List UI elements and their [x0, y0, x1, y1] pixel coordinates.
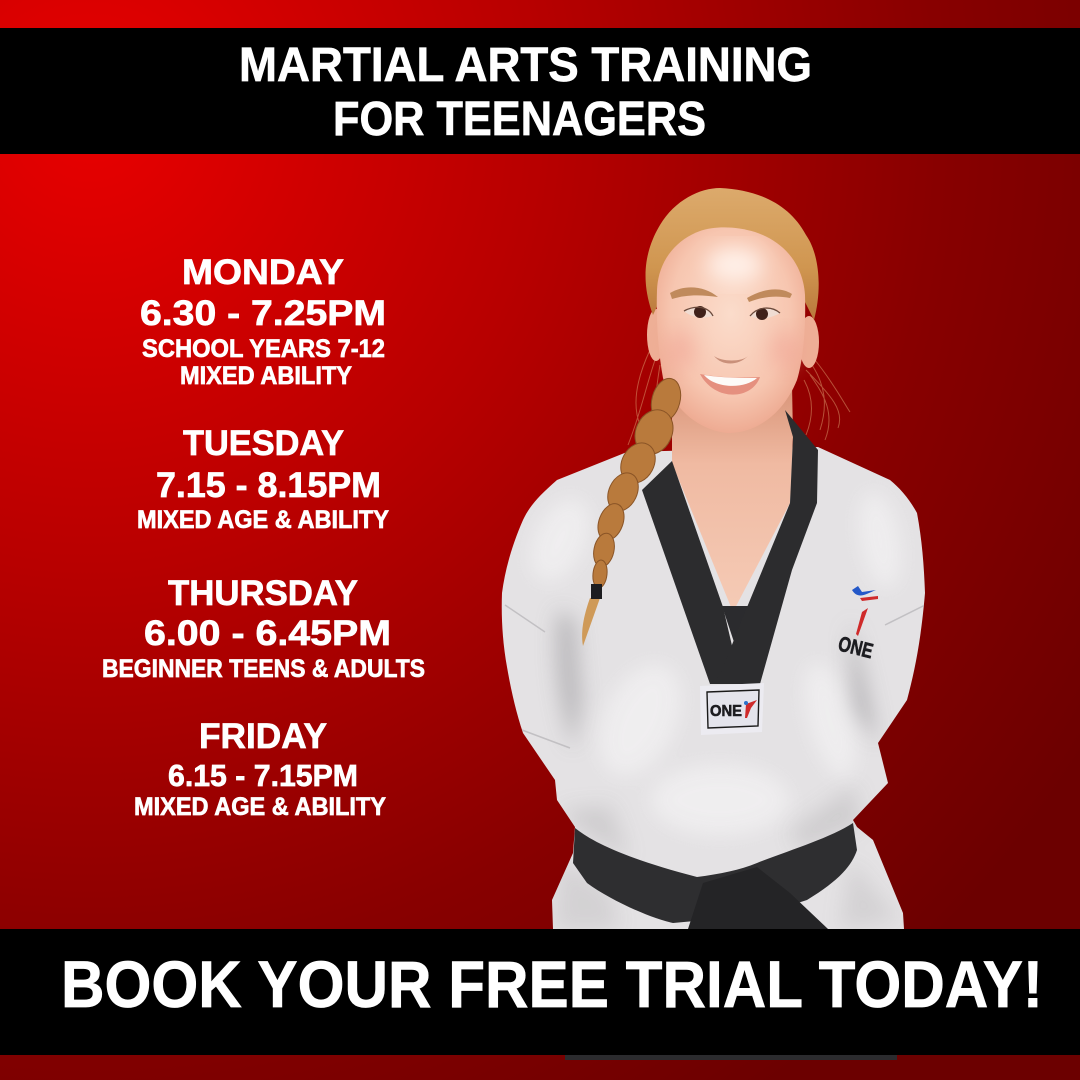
tuesday session: [137, 424, 389, 534]
friday session: MIXED AGE & ABILITY: [134, 793, 386, 821]
thursday session: BEGINNER TEENS & ADULTS: [102, 655, 425, 683]
eyebrows: [670, 287, 792, 302]
monday session: 6.30 - 7.25PM: [140, 294, 386, 333]
friday session: FRIDAY: [199, 717, 327, 756]
cheek blush: [665, 330, 800, 370]
flyaway hair: [628, 350, 850, 445]
gi shading: [555, 610, 900, 930]
sleeve logo: ONE: [836, 633, 875, 663]
thursday session: 6.00 - 6.45PM: [144, 614, 391, 653]
eyes: [684, 306, 780, 320]
belt knot: [688, 867, 828, 929]
thursday session: THURSDAY: [168, 574, 358, 613]
sleeve seams: [505, 605, 925, 748]
neck: [672, 385, 793, 612]
nose shadow: [714, 356, 748, 364]
schedule: [102, 253, 425, 821]
title: MARTIAL ARTS TRAINING: [239, 39, 812, 92]
gi badge: [700, 683, 764, 735]
tuesday session: TUESDAY: [183, 424, 344, 463]
forehead highlight: [707, 247, 763, 283]
black belt: [573, 823, 857, 923]
strip below banner: [565, 1055, 897, 1060]
black collar: [642, 410, 818, 684]
title: [239, 39, 812, 146]
left lapel: [642, 461, 733, 684]
tuesday session: 7.15 - 8.15PM: [156, 466, 381, 505]
left ear: [647, 309, 665, 361]
call to action banner: [0, 929, 1080, 1055]
monday session: MONDAY: [182, 253, 344, 292]
right ear: [799, 316, 819, 368]
title banner: [0, 28, 1080, 154]
title: FOR TEENAGERS: [333, 93, 706, 146]
gi badge: ONE: [710, 703, 742, 720]
right lapel: [710, 410, 818, 684]
smile: [700, 374, 760, 395]
monday session: SCHOOL YEARS 7-12: [142, 335, 385, 363]
undershirt: [722, 606, 748, 645]
hair: [646, 188, 819, 320]
thursday session: [102, 574, 425, 683]
gi jacket: [495, 440, 935, 935]
gi highlights: [536, 502, 896, 831]
head: [657, 227, 805, 433]
student photo: [495, 188, 935, 935]
sleeve logo: [836, 586, 878, 663]
monday session: [140, 253, 386, 390]
braid: [582, 375, 685, 646]
friday session: [134, 717, 386, 821]
friday session: 6.15 - 7.15PM: [168, 758, 358, 793]
tuesday session: MIXED AGE & ABILITY: [137, 506, 389, 534]
monday session: MIXED ABILITY: [180, 362, 352, 390]
